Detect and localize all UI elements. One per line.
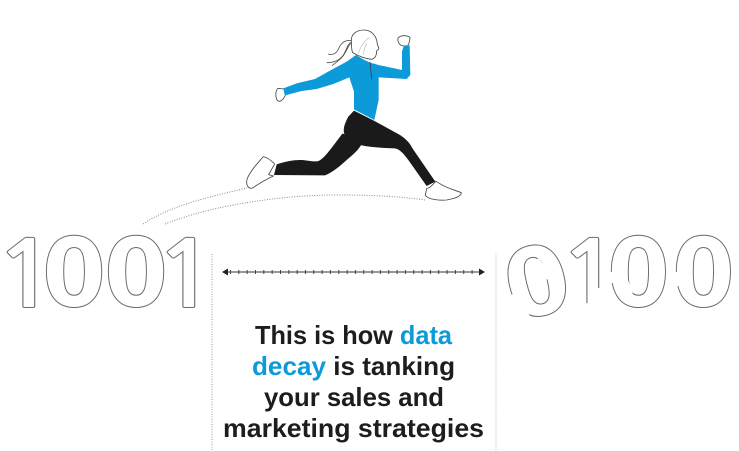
double-headed arrow with ticks	[222, 268, 485, 276]
runner: front leg and hips	[344, 111, 435, 186]
dotted arc: lower jump path	[165, 195, 425, 224]
binary digits: 0100 decaying: 0	[607, 218, 670, 329]
headline: decay is tanking	[252, 351, 455, 381]
binary digits: 0100 decaying: 1	[557, 231, 624, 322]
runner: hair shading	[358, 37, 369, 55]
binary digits: 0100 decaying: 0	[493, 222, 582, 345]
binary digits: 1001: 0	[42, 219, 106, 329]
runner: front fist	[398, 36, 410, 47]
runner: back leg	[274, 133, 361, 175]
runner: ponytail	[327, 40, 352, 66]
runner illustration	[247, 30, 461, 200]
headline: marketing strategies	[223, 413, 484, 443]
runner: front shoe	[425, 181, 461, 200]
left dotted divider	[211, 254, 213, 451]
headline: This is how data	[255, 320, 453, 350]
binary digits: 0100 decaying	[493, 218, 735, 345]
binary digits: 0100 decaying: 0	[672, 218, 735, 329]
runner: back fist	[276, 88, 285, 101]
dotted arc: upper jump path	[143, 188, 247, 224]
headline	[223, 320, 484, 443]
runner: back shoe	[247, 157, 275, 188]
runner: zip	[370, 62, 372, 79]
binary digits: 1001: 1	[153, 231, 220, 322]
runner: head	[351, 30, 379, 59]
right dotted divider	[495, 254, 497, 451]
binary digits: 1001	[0, 219, 220, 329]
binary digits: 1001: 0	[104, 219, 168, 329]
headline: your sales and	[264, 382, 444, 412]
runner: blue top	[283, 45, 410, 120]
